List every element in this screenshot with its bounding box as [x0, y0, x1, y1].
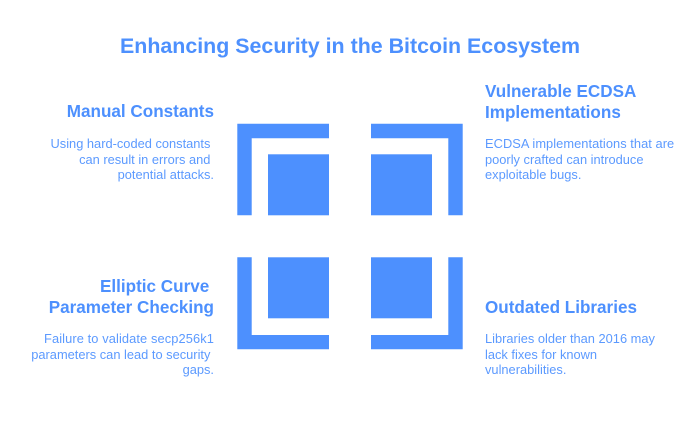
panel: outdated libraries	[485, 298, 655, 377]
text: outdated libraries description: Libraries older than 2016 may lack fixes for known vulnerabilities.	[485, 331, 655, 377]
icon: bottom-right quadrant	[371, 257, 463, 349]
panel: manual constants	[50, 102, 214, 182]
icon: top-left quadrant	[237, 124, 329, 215]
text: manual constants description: Using hard-coded constants can result in errors and potential attacks.	[50, 136, 214, 182]
panel: elliptic curve parameter checking	[31, 277, 214, 377]
title: Enhancing Security in the Bitcoin Ecosystem	[120, 34, 580, 58]
heading: manual constants: Manual Constants	[67, 102, 214, 121]
text: elliptic curve description: Failure to validate secp256k1 parameters can lead to security gaps.	[31, 331, 214, 377]
text: ECDSA description: ECDSA implementations that are poorly crafted can introduce exploitable bugs.	[485, 136, 674, 182]
icon: top-right quadrant	[371, 124, 463, 215]
heading: outdated libraries: Outdated Libraries	[485, 298, 637, 317]
heading: vulnerable ECDSA implementations: Vulnerable ECDSA Implementations	[485, 82, 636, 122]
heading: elliptic curve parameter checking: Elliptic Curve Parameter Checking	[49, 277, 214, 317]
panel: vulnerable ECDSA implementations	[485, 82, 674, 182]
icon: bottom-left quadrant	[237, 257, 329, 349]
